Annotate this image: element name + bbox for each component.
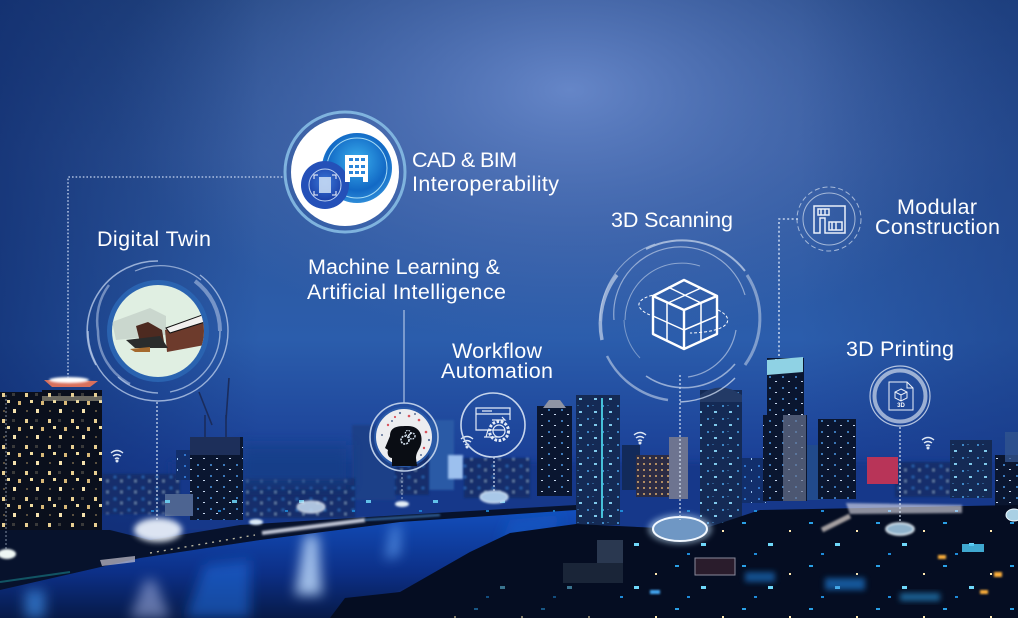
connector: left tower down [5,395,7,550]
sensor hotspot: right edge [1006,509,1018,521]
heading: Workflow Automation: Workflow [452,339,542,363]
left shore and waterfront [0,490,576,590]
connector: 3D Scanning [679,375,681,520]
wifi icon: center [634,432,646,444]
sensor hotspot: Workflow Automation [480,491,508,503]
sensor hotspot: riverside small [249,519,263,525]
heading: Modular Construction: Construction [875,215,1000,239]
sensor hotspot: riverside large [297,501,325,513]
sensor hotspot: 3D Printing [886,523,914,535]
sensor hotspot: Machine Learning [395,501,409,507]
sensor hotspot: far left [0,549,16,559]
distant hazy skyline [102,420,1018,532]
heading: Machine Learning and Artificial Intelligence: Artificial Intelligence [307,280,506,304]
heading: Machine Learning and Artificial Intelligence: Machine Learning & [308,255,500,279]
sensor hotspot: 3D Scanning [648,514,712,544]
icon: cloud of overlapping blue discs with buildings [301,133,392,209]
wifi icon: left [111,450,123,462]
connector: Workflow Automation [493,457,495,492]
connector: CAD to left tower [68,177,286,378]
node: Machine Learning and Artificial Intelligence [370,403,438,471]
river reflections [25,515,560,618]
node: CAD and BIM Interoperability [285,112,405,232]
heading: Workflow Automation: Automation [441,359,553,383]
icon: monitor with gear [476,408,510,440]
icon: 3D file: 3D [897,403,906,409]
node: 3D Printing [870,366,930,426]
left twin towers [0,377,102,542]
sensor hotspot: Digital Twin [134,518,182,542]
node: Digital Twin [87,261,228,401]
node: Workflow Automation [461,393,525,457]
foreground dark neighbourhood [330,503,1018,618]
heading: Digital Twin: Digital Twin [97,227,211,251]
node: Modular Construction [797,187,861,251]
central and right towers [537,357,1018,536]
connector: Digital Twin [156,402,158,520]
river [0,507,576,618]
connector: Machine Learning down [401,473,403,500]
heading: CAD and BIM Interoperability: Interoperability [412,172,559,196]
connector: Machine Learning [403,310,405,403]
heading: CAD and BIM Interoperability: CAD & BIM [412,148,517,172]
connector: 3D Printing [899,427,901,522]
icon: head with gears [385,426,422,466]
building model thumbnail [112,308,205,352]
node: 3D Scanning [600,240,760,402]
mid-left dark tower and crane [165,378,243,520]
icon: wireframe cube with scan orbit [639,280,728,349]
heading: 3D Scanning: 3D Scanning [611,208,733,232]
icon: modular building [814,206,845,233]
connector: Modular Construction [779,219,798,356]
heading: Modular Construction: Modular [897,195,977,219]
heading: 3D Printing: 3D Printing [846,337,954,361]
wifi icon: workflow [461,436,473,448]
wifi icon: right [922,438,934,449]
